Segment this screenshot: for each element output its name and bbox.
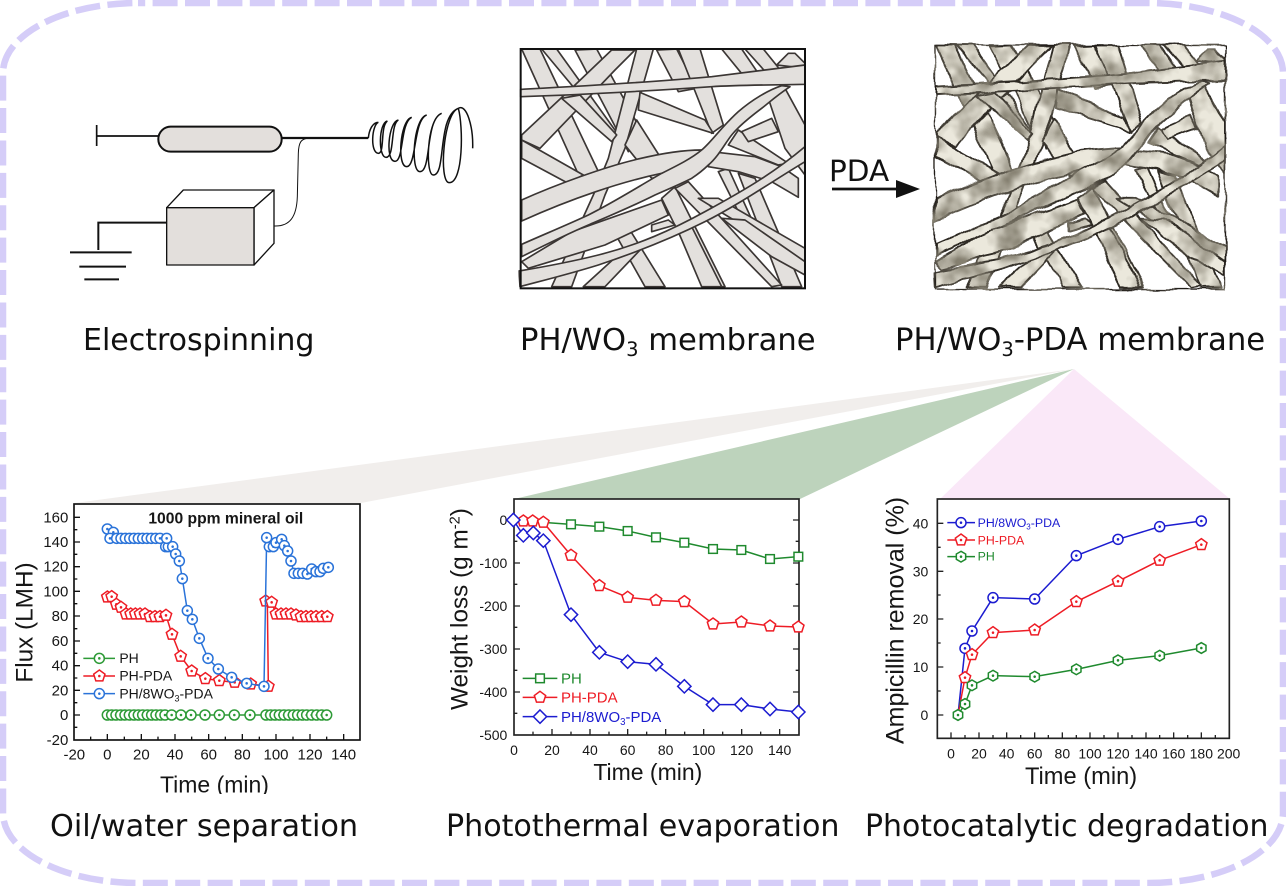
chart: weight loss: -100	[479, 555, 508, 571]
legend	[83, 650, 214, 703]
series: PH-PDA	[958, 539, 1207, 715]
chart: weight loss: -500	[479, 727, 508, 743]
chart: weight loss: 20	[544, 742, 560, 758]
caption: electrospinning: Electrospinning	[83, 323, 314, 358]
chart: oil/water flux: 100	[43, 583, 68, 600]
caption: PH/WO3-PDA membrane: -PDA membrane	[1014, 323, 1265, 358]
caption: oil/water separation: Oil/water separation	[50, 809, 358, 844]
series: PH-PDA	[102, 591, 333, 691]
chart: oil/water flux: 120	[297, 746, 323, 763]
legend: -PDA	[625, 709, 661, 726]
chart: oil/water flux: 40	[52, 658, 68, 675]
series: PH	[102, 710, 332, 720]
chart: weight loss: 0	[500, 512, 508, 528]
funnel: to oil/water chart	[75, 369, 1074, 503]
icon: fibre coil	[368, 108, 473, 183]
chart: oil/water flux: 140	[43, 534, 68, 551]
chart: ampicillin removal: 20	[913, 611, 929, 627]
chart: weight loss	[446, 499, 805, 785]
chart: oil/water flux: -20	[47, 732, 68, 749]
legend: PH	[561, 671, 582, 688]
chart: weight loss: 60	[620, 742, 636, 758]
arrow with PDA label	[829, 154, 920, 198]
chart: ampicillin removal: 120	[1106, 746, 1130, 762]
membrane illustration: PH/WO3	[519, 49, 805, 288]
legend	[523, 671, 661, 728]
caption: photothermal evaporation: Photothermal evaporation	[446, 809, 840, 844]
legend: 3	[620, 717, 625, 728]
chart: weight loss: -200	[479, 598, 508, 614]
chart: ampicillin removal: 60	[1027, 746, 1043, 762]
chart: oil/water flux: 80	[52, 608, 68, 625]
chart: oil/water flux: 0	[60, 707, 68, 724]
chart: oil/water flux: 100	[263, 746, 289, 763]
legend: -PDA	[180, 685, 214, 701]
chart: weight loss: 40	[582, 742, 598, 758]
chart: weight loss: -300	[479, 641, 508, 657]
icon: needle	[282, 134, 368, 141]
chart: weight loss: 100	[692, 742, 716, 758]
legend: PH-PDA	[978, 533, 1025, 547]
caption: PH/WO3 membrane: membrane	[639, 323, 816, 358]
caption: PH/WO3 membrane: 3	[626, 338, 639, 361]
icon: connecting wire	[274, 138, 307, 226]
chart: ampicillin removal	[881, 497, 1241, 790]
legend	[947, 516, 1061, 564]
legend: PH	[119, 650, 139, 666]
series: PH/8WO3-PDA	[507, 513, 805, 719]
legend: PH-PDA	[119, 668, 173, 684]
icon: power supply box	[167, 190, 274, 265]
chart: oil/water flux: 120	[43, 559, 68, 576]
chart: ampicillin removal: 40	[999, 746, 1015, 762]
chart: oil/water flux: 20	[52, 682, 68, 699]
series: PH	[953, 643, 1206, 720]
chart: oil/water flux: 0	[103, 746, 112, 763]
y axis label: -2	[447, 516, 463, 529]
y axis label: Weight loss (g m	[446, 529, 473, 710]
chart: ampicillin removal: 20	[971, 746, 987, 762]
x axis label: Time (min)	[593, 759, 702, 785]
legend: PH/8WO	[561, 709, 620, 726]
chart: oil/water flux: 80	[234, 746, 251, 763]
chart: ampicillin removal: 140	[1134, 746, 1158, 762]
chart: ampicillin removal: 80	[1055, 746, 1070, 762]
legend: PH	[978, 550, 995, 564]
chart title: 1000 ppm mineral oil	[148, 510, 303, 527]
series: PH/8WO3-PDA	[102, 524, 333, 691]
legend: -PDA	[1031, 516, 1061, 530]
chart: ampicillin removal: 200	[1217, 746, 1241, 762]
chart: oil/water flux: 60	[52, 633, 68, 650]
y axis label: )	[446, 508, 473, 516]
electrospinning schematic	[70, 108, 473, 279]
icon: syringe plunger	[97, 125, 158, 146]
caption: PH/WO3 membrane: PH/WO	[520, 323, 626, 358]
chart: ampicillin removal: 100	[1078, 746, 1102, 762]
chart: oil/water flux: 40	[167, 746, 183, 763]
chart: ampicillin removal: 180	[1190, 746, 1213, 762]
chart: oil/water flux: 160	[43, 509, 68, 526]
chart: ampicillin removal: 30	[913, 563, 929, 579]
y axis label: Flux (LMH)	[11, 562, 38, 683]
series: PH/8WO3-PDA	[958, 516, 1206, 715]
chart: ampicillin removal: 160	[1162, 746, 1186, 762]
chart: ampicillin removal: 0	[947, 746, 955, 762]
chart: weight loss: -400	[479, 684, 508, 700]
arrow with PDA label: PDA	[829, 154, 889, 188]
x axis label: Time (min)	[1025, 764, 1137, 790]
chart: weight loss: 80	[658, 742, 674, 758]
caption: PH/WO3-PDA membrane: 3	[1001, 338, 1014, 361]
y axis label: Ampicillin removal (%)	[881, 497, 909, 744]
funnel: to degradation chart	[940, 369, 1230, 499]
chart: weight loss: 0	[510, 742, 518, 758]
chart: oil/water flux: -20	[63, 746, 85, 763]
chart: oil/water flux: 20	[133, 746, 150, 763]
series: PH	[514, 520, 803, 563]
chart: ampicillin removal: 10	[913, 659, 929, 675]
series: PH-PDA	[514, 515, 804, 632]
legend: 3	[1026, 523, 1031, 532]
icon: ground symbol	[70, 223, 167, 279]
legend: 3	[175, 693, 180, 703]
chart: ampicillin removal: 0	[921, 707, 929, 723]
legend: PH/8WO	[119, 685, 175, 701]
chart: ampicillin removal: 40	[913, 515, 929, 531]
legend: PH-PDA	[561, 690, 618, 707]
chart: weight loss: 140	[768, 742, 792, 758]
x axis label: Time (min)	[160, 772, 269, 798]
membrane illustration: PH/WO3-PDA	[933, 45, 1225, 289]
chart: oil/water flux: 60	[200, 746, 217, 763]
funnel: to evaporation chart	[514, 369, 1074, 499]
icon: syringe barrel	[158, 127, 282, 152]
chart: oil/water flux	[11, 504, 360, 802]
chart: weight loss: 120	[730, 742, 754, 758]
legend: PH/8WO	[978, 516, 1026, 530]
caption: photocatalytic degradation: Photocatalytic degradation	[865, 809, 1268, 844]
chart: oil/water flux: 140	[331, 746, 356, 763]
caption: PH/WO3-PDA membrane: PH/WO	[895, 323, 1001, 358]
